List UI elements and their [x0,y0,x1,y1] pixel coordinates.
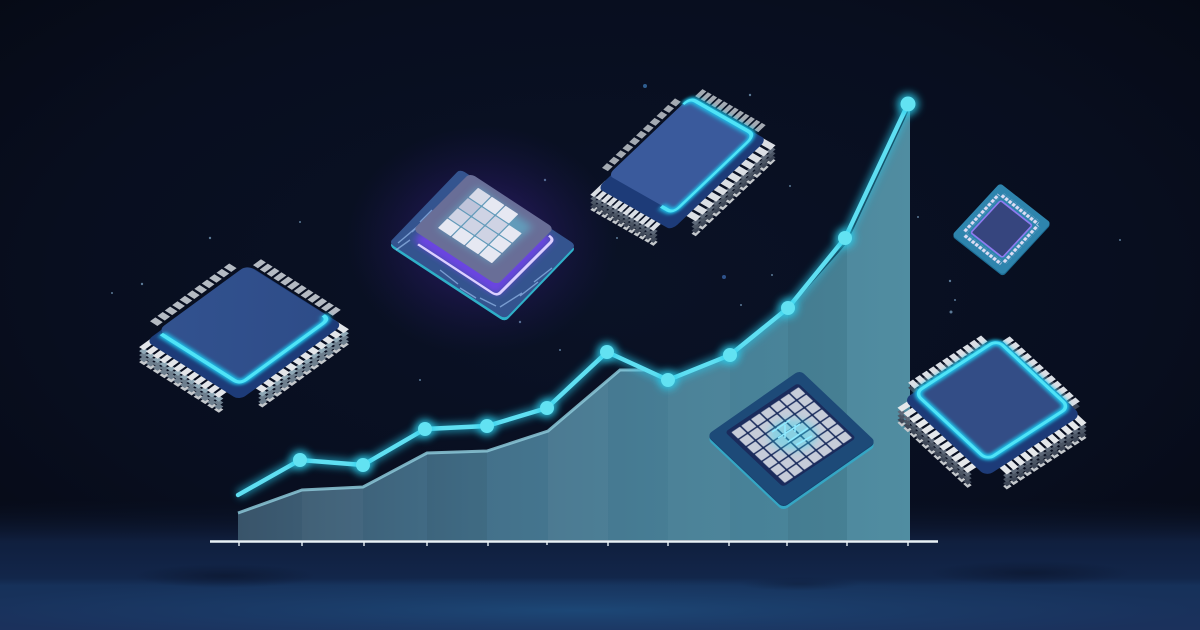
x axis with ticks [210,541,938,546]
board [707,374,876,511]
lid [413,173,554,285]
chip: small teal top right [952,183,1051,276]
line glow [238,104,908,495]
neon edge [161,269,329,384]
chip: top centre [590,83,776,257]
chip: left large [139,250,349,425]
chip substrate [598,98,767,230]
area chart [238,108,910,540]
key blocks [438,188,532,263]
area top edge [238,370,668,513]
neon edge [915,340,1069,460]
chip: purple glowing processor [389,169,576,322]
growth trend line with data points [238,93,919,495]
chip die [915,340,1069,460]
floor glow band [0,500,1200,630]
area fill [238,108,910,540]
board traces [396,210,552,307]
pad grid [730,386,853,484]
key glow [437,187,533,263]
points [293,96,916,472]
centre glow [769,419,817,451]
chip die [608,97,755,212]
contact pads [960,190,1043,268]
board [389,172,576,322]
neon edge [608,98,755,213]
background star particles [111,84,1121,381]
chip die [158,265,329,382]
chip substrate [903,338,1081,477]
board [952,184,1051,276]
die [971,200,1032,258]
purple glow behind processor chip [347,125,617,355]
column bands [302,108,910,540]
line [238,104,908,495]
chip: grid processor [707,370,876,511]
dark die [725,383,856,487]
chip: right large [897,325,1087,504]
chip substrate [146,266,343,400]
point glow [290,93,919,475]
purple neon ring [413,184,554,296]
